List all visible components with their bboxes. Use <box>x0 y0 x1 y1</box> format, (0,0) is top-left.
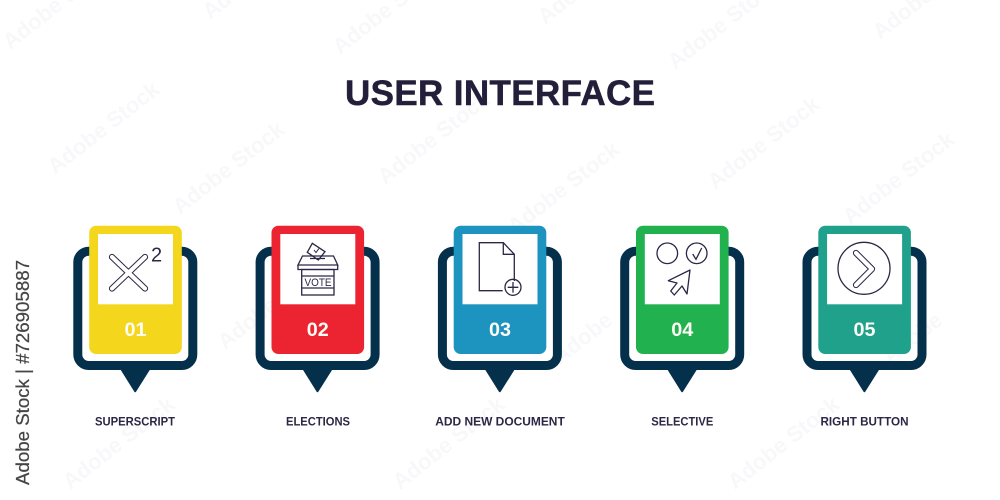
panel: 01 superscript <box>78 226 193 428</box>
watermark pattern: Adobe Stock <box>838 126 960 229</box>
label elections: ELECTIONS <box>286 416 350 428</box>
pin frame 04 <box>625 251 740 392</box>
watermark pattern: Adobe Stock <box>703 91 825 194</box>
watermark pattern: Adobe Stock <box>168 116 290 219</box>
label add new document: ADD NEW DOCUMENT <box>435 416 565 428</box>
side credit text: Adobe Stock | #726905887 <box>12 260 33 485</box>
number 03: 03 <box>489 319 511 341</box>
number 01: 01 <box>124 319 147 341</box>
panel: 04 selective <box>625 226 740 428</box>
number 02: 02 <box>307 319 329 341</box>
panel: 03 add new document <box>435 226 565 428</box>
icon: ballot box <box>298 243 338 295</box>
green card 04 <box>636 226 729 354</box>
pin frame 05 <box>807 251 922 392</box>
number 04: 04 <box>671 319 693 341</box>
icon: right chevron button <box>838 242 890 294</box>
yellow card 01 <box>89 226 182 354</box>
watermark pattern: Adobe <box>878 307 947 369</box>
watermark pattern: Adobe Stock <box>373 86 495 189</box>
panel: 02 elections <box>260 226 375 428</box>
watermark pattern: Adobe Stock <box>723 391 845 494</box>
pin frame 02 <box>260 251 375 392</box>
label right button: RIGHT BUTTON <box>820 416 908 428</box>
blue card 03 <box>454 226 546 354</box>
label selective: SELECTIVE <box>651 416 714 428</box>
icon: superscript x squared: 2 <box>151 244 162 266</box>
number 05: 05 <box>854 319 876 341</box>
icon: superscript x squared <box>112 244 162 288</box>
watermark pattern: Adobe <box>548 307 617 369</box>
teal card 05 <box>818 226 911 354</box>
panel: 05 right button <box>807 226 922 428</box>
pin frame 01 <box>78 251 193 392</box>
icon: selective cursor <box>657 243 707 295</box>
red card 02 <box>272 226 364 354</box>
watermark pattern: Adobe Stock <box>503 136 625 239</box>
icon: add document <box>479 243 521 295</box>
watermark pattern: Adobe Stock <box>388 391 510 494</box>
title: USER INTERFACE <box>345 74 655 113</box>
watermark pattern: Adobe Stock <box>43 76 165 179</box>
watermark pattern: Adobe Stock <box>58 391 180 494</box>
watermark pattern: Adobe <box>213 292 282 354</box>
label superscript: SUPERSCRIPT <box>95 416 175 428</box>
pin frame 03 <box>442 251 557 392</box>
icon: ballot box: VOTE <box>304 277 332 289</box>
